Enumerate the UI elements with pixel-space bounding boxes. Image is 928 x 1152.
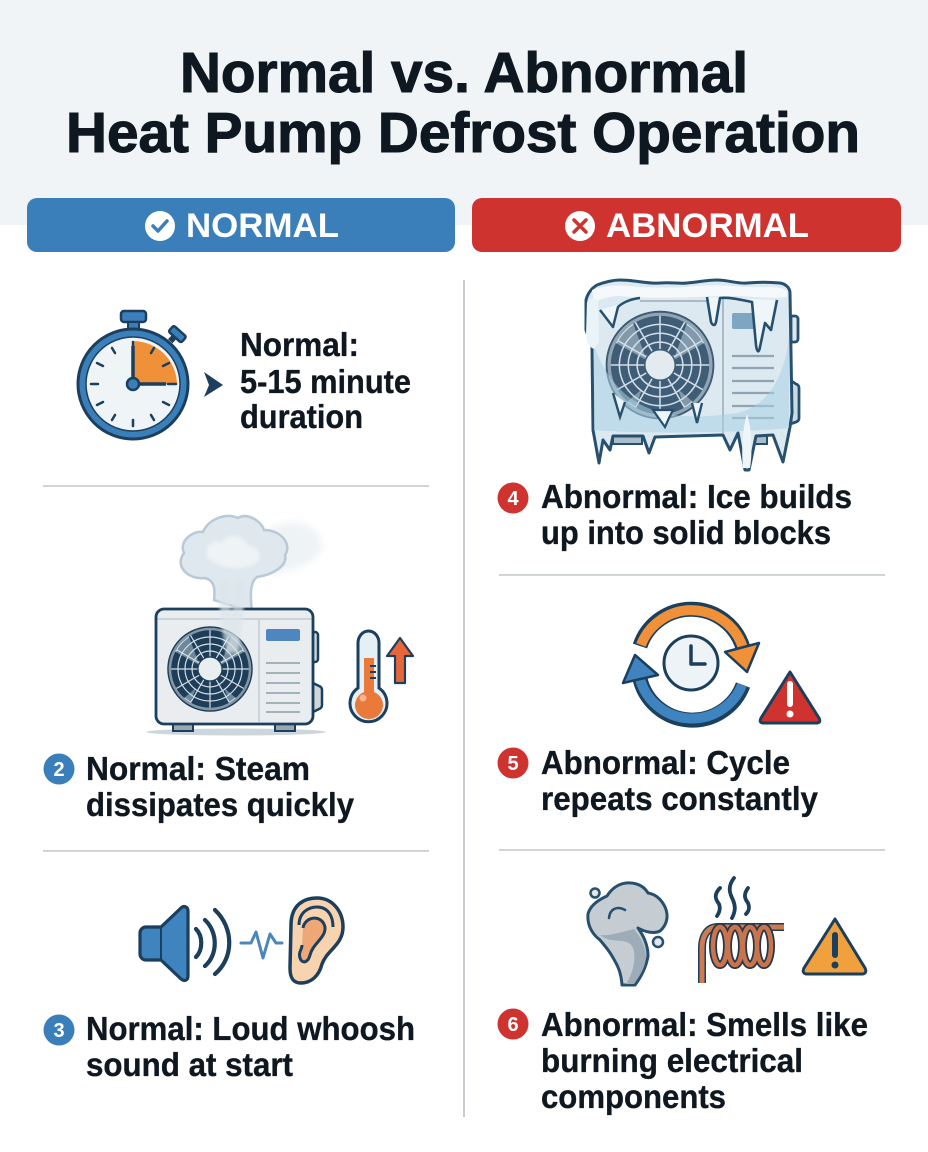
title: Normal vs. Abnormal bbox=[180, 41, 748, 105]
text: normal sound: sound at start bbox=[86, 1046, 293, 1083]
number badge 6: 6 bbox=[507, 1014, 519, 1036]
text: normal duration: 5-15 minute bbox=[240, 363, 411, 400]
column header: abnormal bbox=[472, 198, 901, 252]
text: normal steam bbox=[44, 750, 355, 823]
number badge 2: 2 bbox=[53, 759, 65, 781]
text: normal sound bbox=[44, 1010, 415, 1083]
panel: normal sound bbox=[44, 898, 415, 1083]
panel: normal steam bbox=[44, 516, 413, 823]
number badge 4: 4 bbox=[507, 488, 519, 510]
icon: frozen outdoor unit bbox=[586, 280, 799, 470]
icon: stopwatch bbox=[78, 311, 188, 439]
number badge 3 bbox=[44, 1014, 74, 1046]
text: normal sound: Normal: Loud whoosh bbox=[86, 1010, 415, 1047]
text: abnormal cycle: repeats constantly bbox=[541, 780, 819, 817]
text: normal duration: Normal: bbox=[240, 326, 359, 363]
text: abnormal ice bbox=[498, 478, 852, 551]
number badge 4 bbox=[498, 482, 528, 514]
icon: smoke bbox=[588, 883, 667, 985]
panel: abnormal smell bbox=[498, 878, 868, 1115]
icon: speaker bbox=[140, 907, 229, 980]
title: Heat Pump Defrost Operation bbox=[66, 101, 860, 165]
panel: normal duration bbox=[78, 311, 411, 439]
number badge 3: 3 bbox=[53, 1020, 65, 1042]
icon: temperature up arrow bbox=[387, 638, 413, 683]
header background bbox=[0, 0, 928, 225]
icon: orange warning triangle bbox=[803, 919, 866, 974]
icon: outdoor unit bbox=[146, 580, 326, 736]
text: normal duration bbox=[240, 326, 411, 435]
text: abnormal cycle: Abnormal: Cycle bbox=[541, 744, 790, 781]
icon: cycle arrows with clock bbox=[623, 609, 759, 720]
text: abnormal smell: components bbox=[541, 1078, 726, 1115]
icon: red warning triangle bbox=[760, 672, 820, 723]
icon: thermometer bbox=[350, 631, 387, 722]
text: abnormal smell: burning electrical bbox=[541, 1042, 803, 1079]
number badge 6 bbox=[498, 1008, 528, 1040]
panel: abnormal cycle bbox=[498, 609, 820, 817]
text: abnormal ice: up into solid blocks bbox=[541, 514, 831, 551]
column header: normal: NORMAL bbox=[186, 207, 339, 245]
number badge 5: 5 bbox=[507, 753, 519, 775]
number badge 5 bbox=[498, 748, 528, 778]
title bbox=[66, 41, 860, 165]
text: abnormal smell: Abnormal: Smells like bbox=[541, 1006, 868, 1043]
icon: check circle bbox=[145, 211, 175, 241]
text: abnormal ice: Abnormal: Ice builds bbox=[541, 478, 852, 515]
column header: abnormal: ABNORMAL bbox=[606, 207, 809, 245]
panel: abnormal ice bbox=[498, 280, 852, 551]
icon: cross circle bbox=[565, 211, 595, 241]
text: abnormal smell bbox=[498, 1006, 868, 1115]
text: abnormal cycle bbox=[498, 744, 819, 817]
text: normal steam: Normal: Steam bbox=[86, 750, 310, 787]
column header: normal bbox=[27, 198, 455, 252]
icon: sound wave bbox=[241, 932, 282, 958]
arrow bbox=[204, 372, 223, 397]
number badge 2 bbox=[44, 754, 74, 784]
text: normal duration: duration bbox=[240, 398, 363, 435]
icon: steam cloud bbox=[181, 516, 322, 612]
icon: burning coil bbox=[702, 878, 784, 983]
icon: ear bbox=[290, 898, 343, 983]
text: normal steam: dissipates quickly bbox=[86, 786, 355, 823]
